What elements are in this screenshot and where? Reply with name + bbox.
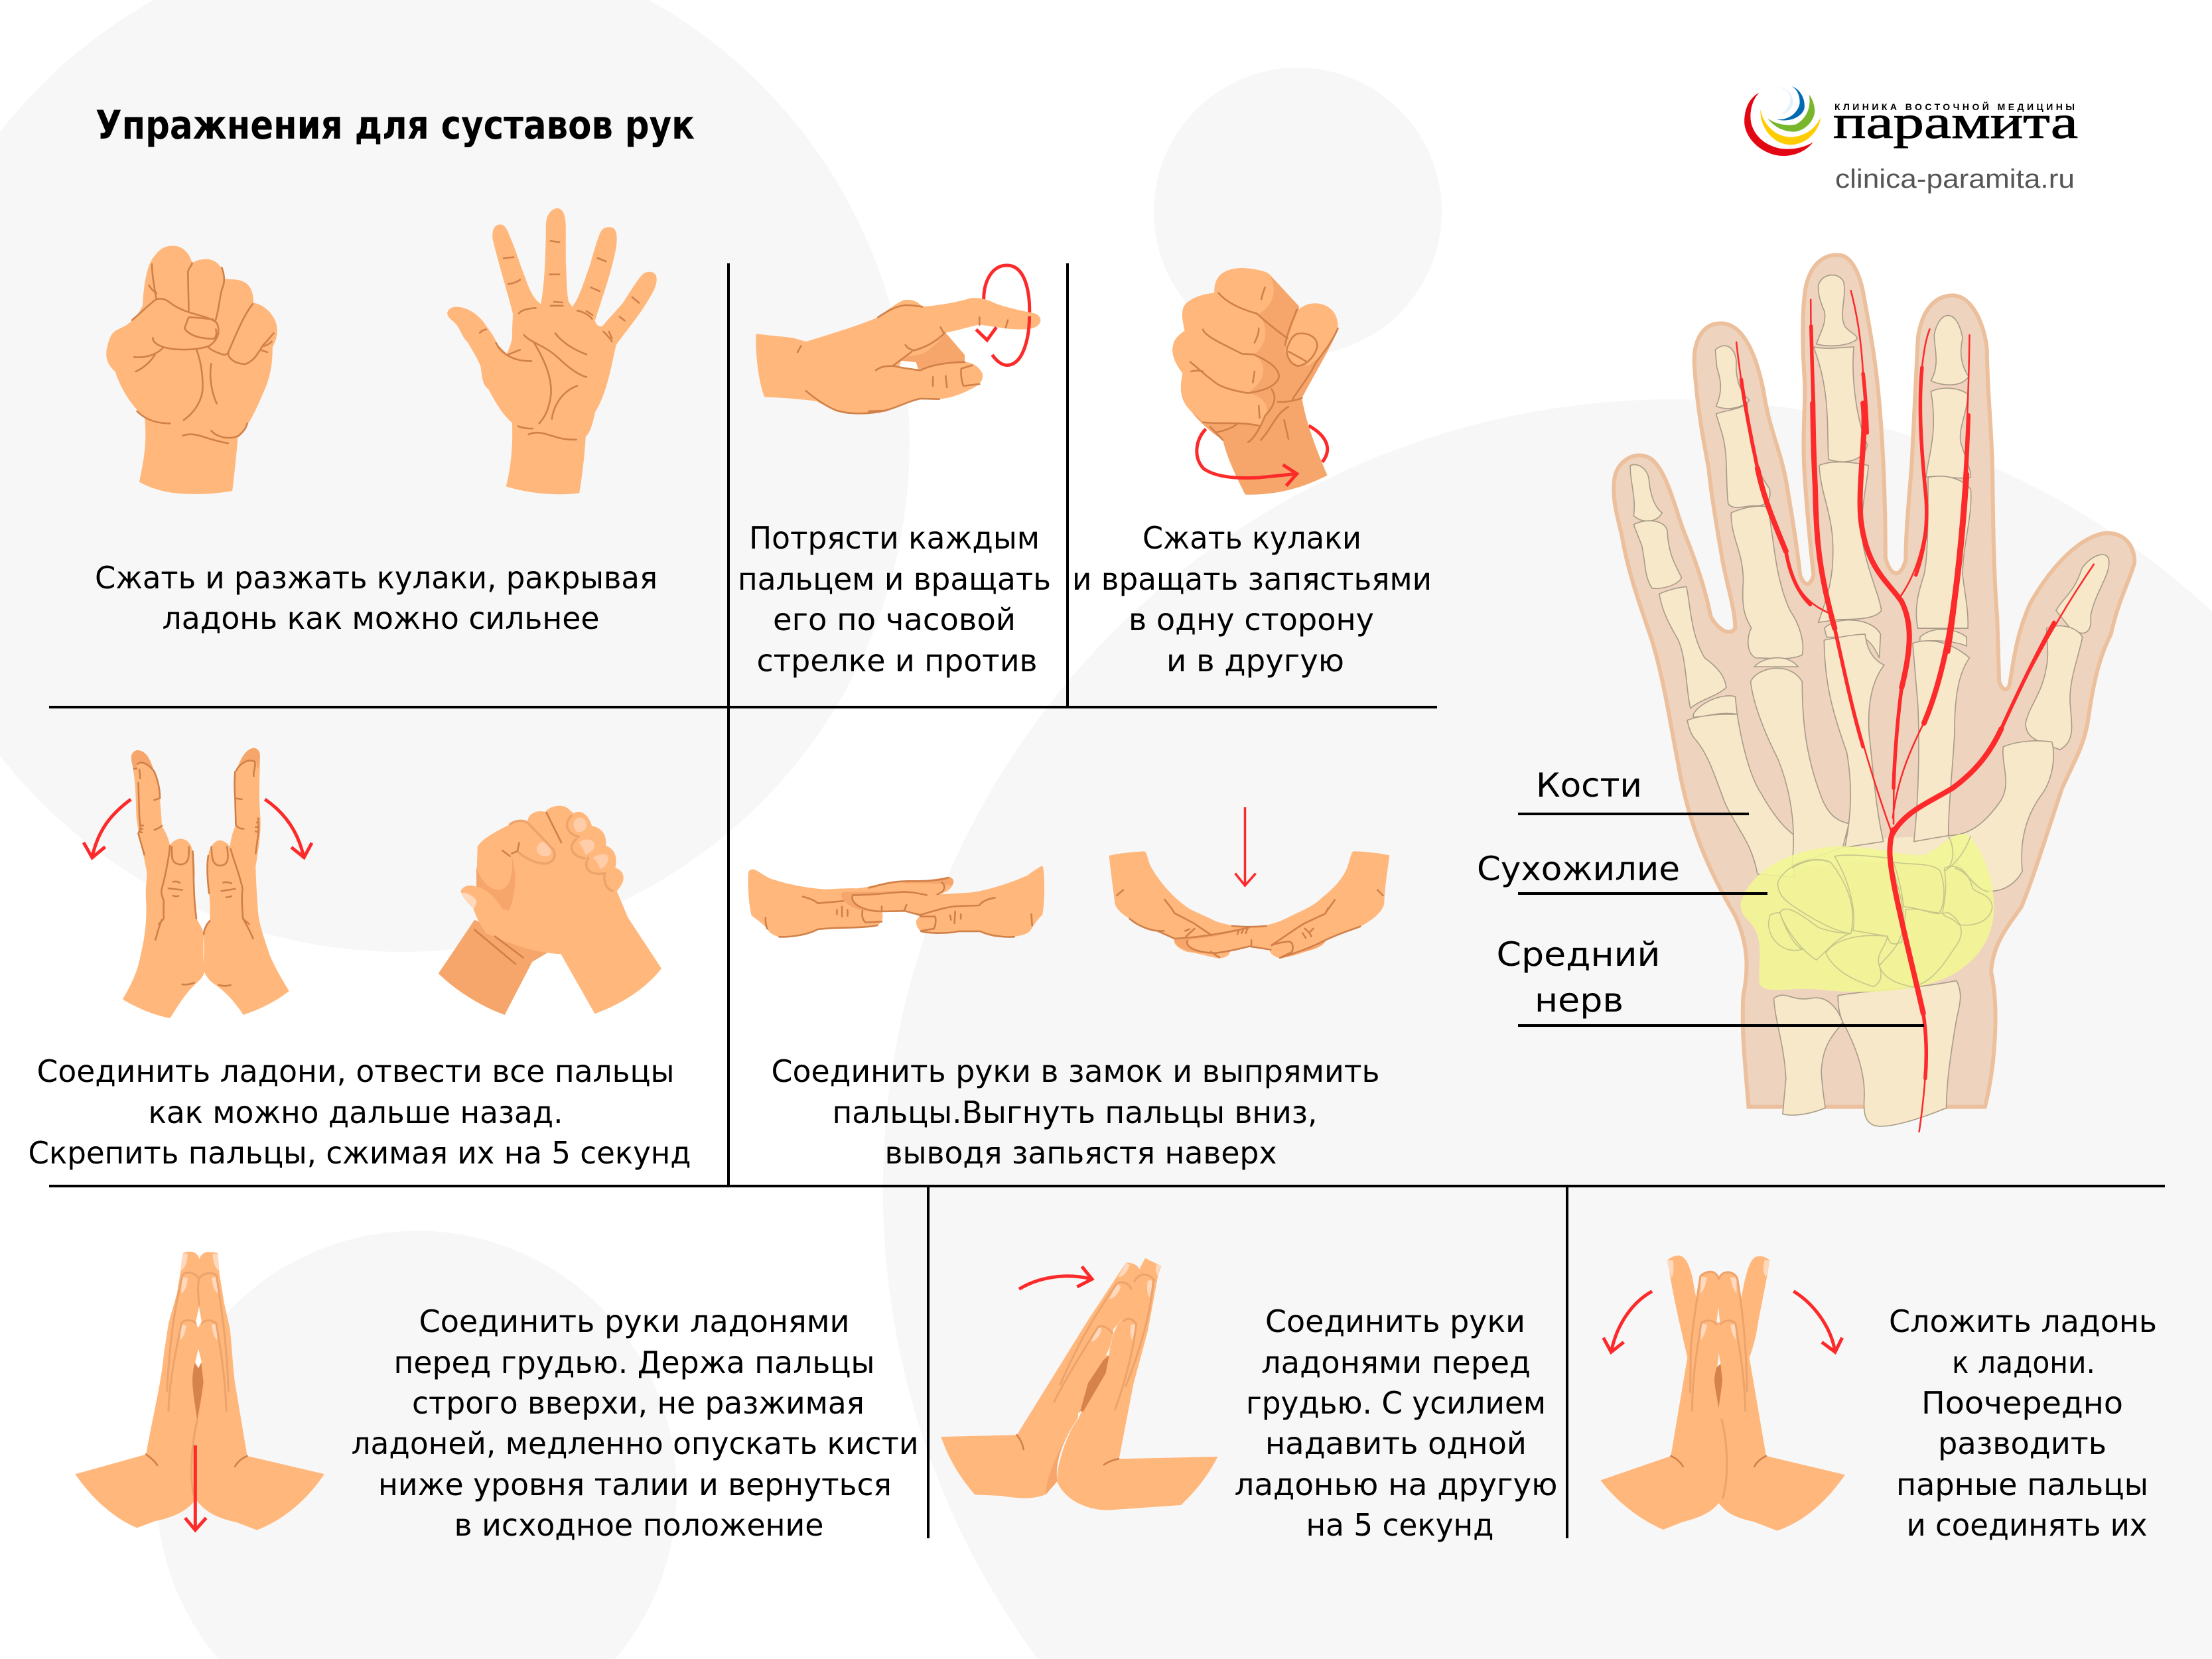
label: bones: Кости bbox=[1536, 766, 1642, 805]
text: interlock bbox=[771, 1053, 1380, 1171]
text: palms down: ниже уровня талии и вернуться bbox=[378, 1467, 892, 1502]
median nerve bbox=[1736, 291, 2094, 1132]
text: press palms: ладонью на другую bbox=[1234, 1467, 1558, 1502]
text: wrist rotation bbox=[1072, 520, 1432, 679]
icon: palms together, move down bbox=[75, 1252, 324, 1530]
text: paired fingers: и соединять их bbox=[1907, 1507, 2147, 1543]
text: palms back: как можно дальше назад. bbox=[149, 1095, 563, 1130]
text: palms back bbox=[28, 1053, 691, 1171]
text: wrist rotation: Сжать кулаки bbox=[1142, 520, 1361, 556]
text: palms down: строго вверхи, не разжимая bbox=[412, 1385, 864, 1421]
arrow: left fingers back bbox=[84, 799, 131, 858]
arrow: right bbox=[1793, 1292, 1842, 1352]
icon: logo swirl bbox=[1744, 86, 1821, 156]
arrow: push down bbox=[1235, 807, 1256, 886]
text: palms back: Соединить ладони, отвести все пальцы bbox=[37, 1053, 674, 1089]
text: finger shake: пальцем и вращать bbox=[738, 561, 1051, 597]
text: paired fingers bbox=[1889, 1303, 2157, 1543]
hand outline bbox=[1614, 255, 2134, 1107]
arrow: right fingers back bbox=[265, 799, 312, 858]
text: paired fingers: парные пальцы bbox=[1896, 1467, 2148, 1502]
text: paired fingers: разводить bbox=[1938, 1426, 2107, 1461]
arrow: wrist rotation front arc bbox=[1197, 429, 1297, 486]
text: interlock: выводя запьястя наверх bbox=[885, 1135, 1277, 1171]
text: press palms bbox=[1234, 1303, 1558, 1543]
text: press palms: грудью. С усилием bbox=[1246, 1385, 1546, 1421]
text: interlock: пальцы.Выгнуть пальцы вниз, bbox=[832, 1095, 1318, 1130]
icon: hand shaking finger with rotation arrow bbox=[756, 265, 1040, 414]
icon: interlocked hands fingers straight bbox=[748, 866, 1044, 937]
text: palms down: в исходное положение bbox=[454, 1507, 824, 1543]
text: press palms: на 5 секунд bbox=[1306, 1507, 1494, 1543]
label: median nerve: нерв bbox=[1535, 981, 1624, 1020]
anatomical hand diagram bbox=[1614, 255, 2134, 1132]
text: palms down: ладоней, медленно опускать кисти bbox=[352, 1426, 918, 1461]
icon: clasped hands bbox=[439, 806, 661, 1015]
text: finger shake: Потрясти каждым bbox=[749, 520, 1040, 556]
text: palms back: Скрепить пальцы, сжимая их на 5 секунд bbox=[28, 1135, 691, 1171]
icon: fist rotating at wrist bbox=[1172, 268, 1338, 495]
finger and metacarpal bones bbox=[1630, 275, 2109, 891]
text: wrist rotation: и в другую bbox=[1166, 643, 1344, 679]
divider lines bbox=[49, 263, 2165, 1538]
text: finger shake: его по часовой bbox=[773, 602, 1016, 637]
arrow: finger rotation back arc bbox=[984, 265, 1030, 316]
icon: tilted pressed hands bbox=[941, 1258, 1217, 1510]
text: interlock: Соединить руки в замок и выпрямить bbox=[771, 1053, 1380, 1089]
label: median nerve: Средний bbox=[1497, 935, 1660, 974]
carpal bones bbox=[1768, 836, 1992, 986]
arrow: push right bbox=[1019, 1266, 1092, 1289]
text: press palms: Соединить руки bbox=[1265, 1303, 1525, 1339]
label: tendon: Сухожилие bbox=[1477, 850, 1680, 888]
text: finger shake: стрелке и против bbox=[756, 643, 1038, 679]
label: median nerve bbox=[1497, 935, 1924, 1026]
text: palms down: Соединить руки ладонями bbox=[419, 1303, 849, 1339]
icon: palms pressed with fingers bent back bbox=[84, 748, 312, 1018]
forearm bones bbox=[1773, 980, 1961, 1126]
logo: Paramita clinic bbox=[1744, 86, 2078, 194]
text: fists bbox=[95, 560, 657, 636]
arrow: finger rotation front arc bbox=[976, 316, 1030, 365]
text: paired fingers: Сложить ладонь bbox=[1889, 1303, 2157, 1339]
logo tagline: КЛИНИКА ВОСТОЧНОЙ МЕДИЦИНЫ bbox=[1834, 101, 2075, 112]
icon: clenched fist bbox=[106, 246, 277, 494]
text: fists: ладонь как можно сильнее bbox=[162, 600, 600, 636]
arrow: wrist rotation back arc bbox=[1309, 426, 1328, 462]
text: fists: Сжать и разжать кулаки, ракрывая bbox=[95, 560, 657, 596]
text: press palms: ладонями перед bbox=[1261, 1345, 1531, 1380]
text: wrist rotation: и вращать запястьями bbox=[1072, 561, 1432, 597]
text: palms down bbox=[352, 1303, 918, 1543]
website: clinica-paramita.ru bbox=[1835, 165, 2075, 194]
text: finger shake bbox=[738, 520, 1051, 679]
arrow: down bbox=[185, 1445, 206, 1530]
icon: hands with paired fingers spread bbox=[1600, 1256, 1845, 1531]
text: wrist rotation: в одну сторону bbox=[1129, 602, 1374, 637]
icon: interlocked hands bent down bbox=[1109, 807, 1389, 958]
text: paired fingers: к ладони. bbox=[1952, 1345, 2095, 1380]
title: Упражнения для суставов рук bbox=[96, 102, 695, 149]
text: paired fingers: Поочередно bbox=[1921, 1385, 2123, 1421]
arrow: left bbox=[1604, 1292, 1652, 1352]
text: palms down: перед грудью. Держа пальцы bbox=[394, 1345, 874, 1380]
text: press palms: надавить одной bbox=[1265, 1426, 1527, 1461]
logo name: парамита bbox=[1833, 97, 2078, 149]
icon: open palm bbox=[447, 208, 657, 494]
tendon area bbox=[1740, 834, 1994, 992]
